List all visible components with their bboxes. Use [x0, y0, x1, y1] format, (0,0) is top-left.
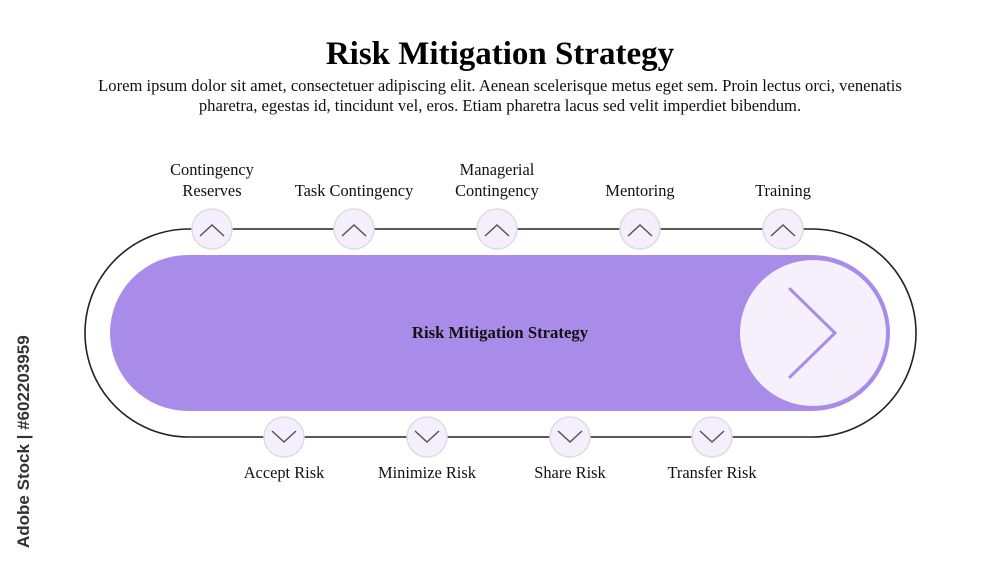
icon: big arrow circle [740, 260, 886, 406]
bottom labels: Accept Risk [244, 463, 325, 482]
bar label: Risk Mitigation Strategy [412, 323, 589, 342]
top labels: Managerial [460, 160, 535, 179]
top labels: Task Contingency [295, 181, 414, 200]
bottom labels: Share Risk [534, 463, 607, 482]
main purple bar [110, 255, 890, 411]
bottom labels [244, 463, 757, 482]
outline track [85, 229, 916, 437]
bottom labels: Minimize Risk [378, 463, 477, 482]
subtitle text: Lorem ipsum dolor sit amet, consectetuer adipiscing elit. Aenean scelerisque metus eget sem. Proin lectus orci, venenatis [98, 76, 902, 95]
top labels [170, 160, 811, 200]
title: Risk Mitigation Strategy [326, 36, 675, 72]
top step icons [192, 209, 803, 249]
top labels: Contingency [170, 160, 255, 179]
top labels: Reserves [182, 181, 242, 200]
watermark side text: Adobe Stock | #602203959 [14, 335, 33, 548]
top labels: Training [755, 181, 811, 200]
bottom step icons [264, 417, 732, 457]
subtitle text: pharetra, egestas id, tincidunt vel, eros. Etiam pharetra lacus sed velit imperdiet bibendum. [199, 96, 801, 115]
top labels: Contingency [455, 181, 540, 200]
top labels: Mentoring [605, 181, 675, 200]
subtitle text [98, 76, 902, 115]
bottom labels: Transfer Risk [667, 463, 757, 482]
